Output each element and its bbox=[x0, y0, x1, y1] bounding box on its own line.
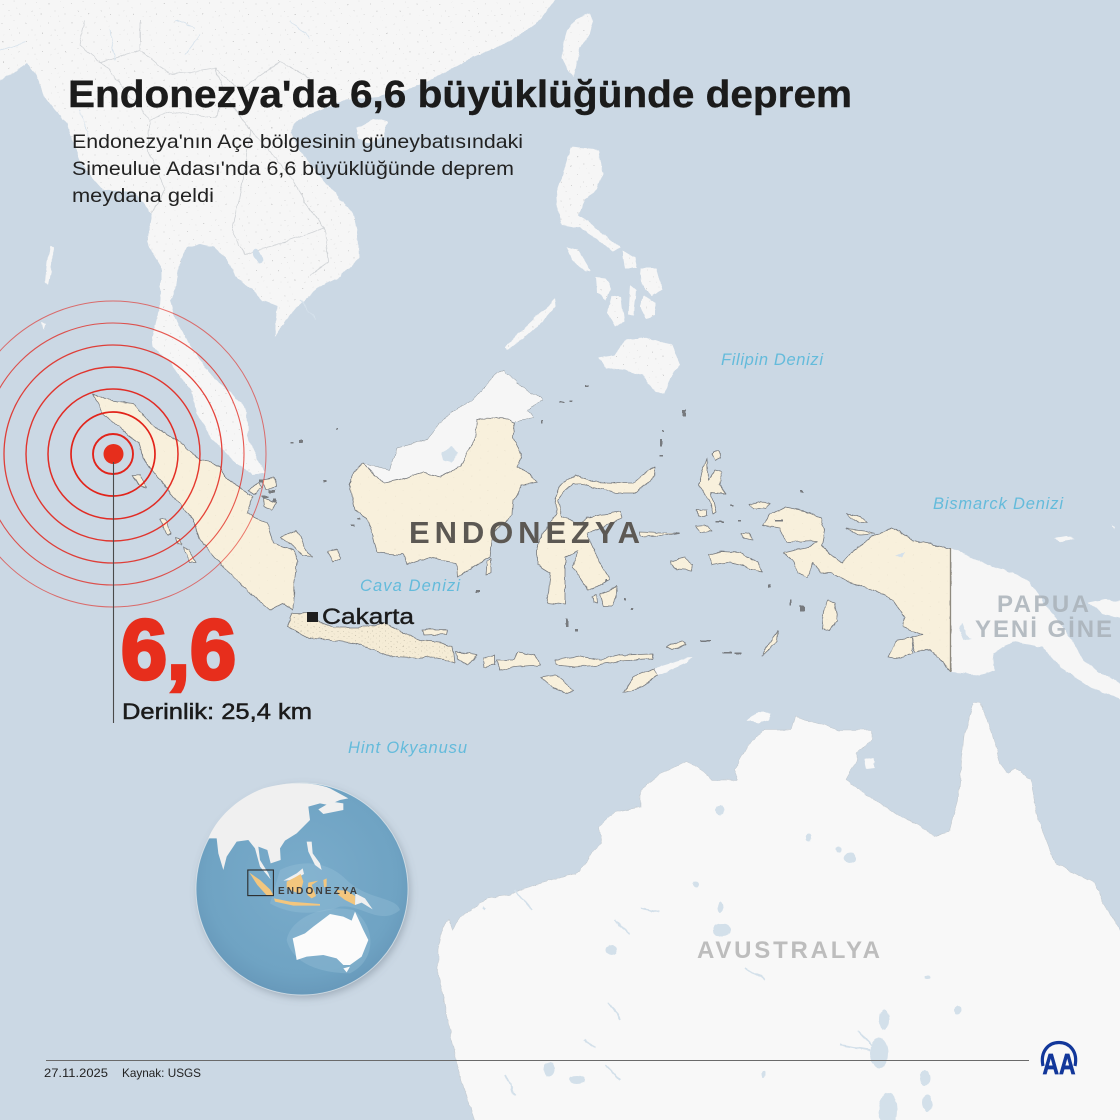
Sulawesi bbox=[537, 467, 655, 605]
locator globe bbox=[196, 783, 410, 998]
Australia bbox=[438, 703, 1120, 1120]
Tiwi and Groote islands bbox=[747, 712, 875, 769]
subtitle: meydana geldi bbox=[72, 185, 214, 207]
sea labels: Bismarck Denizi bbox=[933, 495, 1064, 513]
New Ireland and small islands bbox=[1054, 524, 1115, 541]
Bangka and Belitung bbox=[281, 530, 341, 562]
Lombok bbox=[483, 656, 495, 667]
depth: Derinlik: 25,4 km bbox=[122, 699, 312, 724]
Indonesia land bbox=[93, 393, 951, 693]
Buru bbox=[670, 557, 693, 571]
small scattered islands bbox=[258, 385, 804, 654]
Hainan bbox=[357, 118, 388, 143]
Halmahera bbox=[699, 458, 726, 513]
label Papua New Guinea bbox=[975, 591, 1112, 643]
Bacan and Obi bbox=[696, 510, 712, 532]
footer date: 27.11.2025 bbox=[44, 1066, 108, 1080]
title: Endonezya'da 6,6 büyüklüğünde deprem bbox=[68, 74, 852, 116]
Aru bbox=[822, 601, 837, 630]
globe label: ENDONEZYA bbox=[278, 886, 357, 897]
label Papua New Guinea: YENİ GİNE bbox=[975, 616, 1112, 643]
Biak and Yapen bbox=[845, 513, 875, 535]
Taiwan bbox=[562, 13, 594, 77]
river and lake details on mainland bbox=[0, 20, 315, 320]
globe Australia bbox=[293, 912, 368, 965]
magnitude: 6,6 bbox=[121, 602, 236, 696]
Madura bbox=[422, 630, 448, 635]
Anadolu Agency logo bbox=[1042, 1042, 1076, 1081]
Riau islands bbox=[248, 478, 276, 510]
globe Asia bbox=[208, 783, 348, 879]
subtitle bbox=[72, 131, 523, 207]
footer rule bbox=[46, 1060, 1029, 1062]
sea labels bbox=[348, 351, 1064, 757]
country label Indonesia: ENDONEZYA bbox=[409, 515, 640, 550]
Andaman and Nicobar islands bbox=[42, 245, 53, 330]
Lakes on Papua bbox=[895, 553, 972, 640]
globe Indonesia bbox=[249, 873, 355, 906]
sea labels: Hint Okyanusu bbox=[348, 739, 467, 757]
Mentawai islands bbox=[176, 537, 196, 562]
Timor west bbox=[623, 668, 657, 693]
Buton islands bbox=[592, 585, 617, 606]
Flores bbox=[555, 654, 653, 667]
Pulau Laut bbox=[486, 558, 491, 574]
globe Borneo north bbox=[283, 868, 304, 881]
Sumba bbox=[540, 675, 573, 693]
globe shelf shading bbox=[270, 863, 400, 973]
Australian lakes and rivers bbox=[482, 805, 962, 1120]
subtitle: Simeulue Adası'nda 6,6 büyüklüğünde deprem bbox=[72, 158, 514, 180]
Borneo: Malaysia and Brunei (non-Indonesian land) bbox=[363, 370, 543, 483]
Sumatra bbox=[93, 393, 297, 610]
Waigeo and Misool bbox=[740, 501, 770, 540]
globe Papua New Guinea bbox=[355, 893, 373, 909]
sea labels: Cava Denizi bbox=[360, 577, 461, 595]
Sumbawa bbox=[497, 652, 540, 670]
Java bbox=[287, 613, 455, 663]
Papua New Guinea land bbox=[951, 548, 1120, 708]
Seram bbox=[708, 552, 762, 573]
epicentre dot bbox=[104, 444, 124, 464]
globe Tasmania bbox=[343, 967, 350, 972]
Simeulue island bbox=[132, 475, 146, 488]
capital label: Cakarta bbox=[322, 604, 415, 629]
Philippines bbox=[505, 147, 680, 393]
footer source: Kaynak: USGS bbox=[122, 1066, 201, 1080]
Anadolu Agency logo: AA bbox=[1042, 1049, 1076, 1081]
Morotai bbox=[712, 451, 721, 461]
globe Philippines bbox=[307, 842, 322, 870]
sea labels: Filipin Denizi bbox=[721, 351, 824, 369]
Kalimantan bbox=[350, 418, 538, 577]
Nias bbox=[160, 518, 171, 535]
borders bbox=[80, 20, 328, 275]
Banggai and Peleng bbox=[640, 532, 680, 537]
label Papua New Guinea: PAPUA bbox=[997, 591, 1089, 618]
New Britain bbox=[1088, 600, 1120, 622]
Alor and Wetar bbox=[666, 641, 686, 650]
border line Indonesia and Papua New Guinea bbox=[950, 548, 952, 672]
mainland Southeast Asia bbox=[0, 0, 570, 475]
Lakes on north Borneo bbox=[441, 446, 458, 462]
earthquake rings bbox=[0, 301, 266, 607]
Bali bbox=[456, 652, 477, 665]
Tanimbar bbox=[762, 631, 778, 655]
leader line bbox=[112, 462, 114, 723]
subtitle: Endonezya'nın Açe bölgesinin güneybatısındaki bbox=[72, 131, 523, 153]
globe inset rectangle bbox=[248, 870, 273, 896]
label Australia: AVUSTRALYA bbox=[697, 937, 880, 964]
Papua bbox=[763, 507, 951, 672]
Timor-Leste bbox=[655, 657, 693, 675]
Dolak island bbox=[888, 638, 913, 657]
globe Japan bbox=[318, 802, 343, 814]
capital marker bbox=[307, 612, 318, 622]
